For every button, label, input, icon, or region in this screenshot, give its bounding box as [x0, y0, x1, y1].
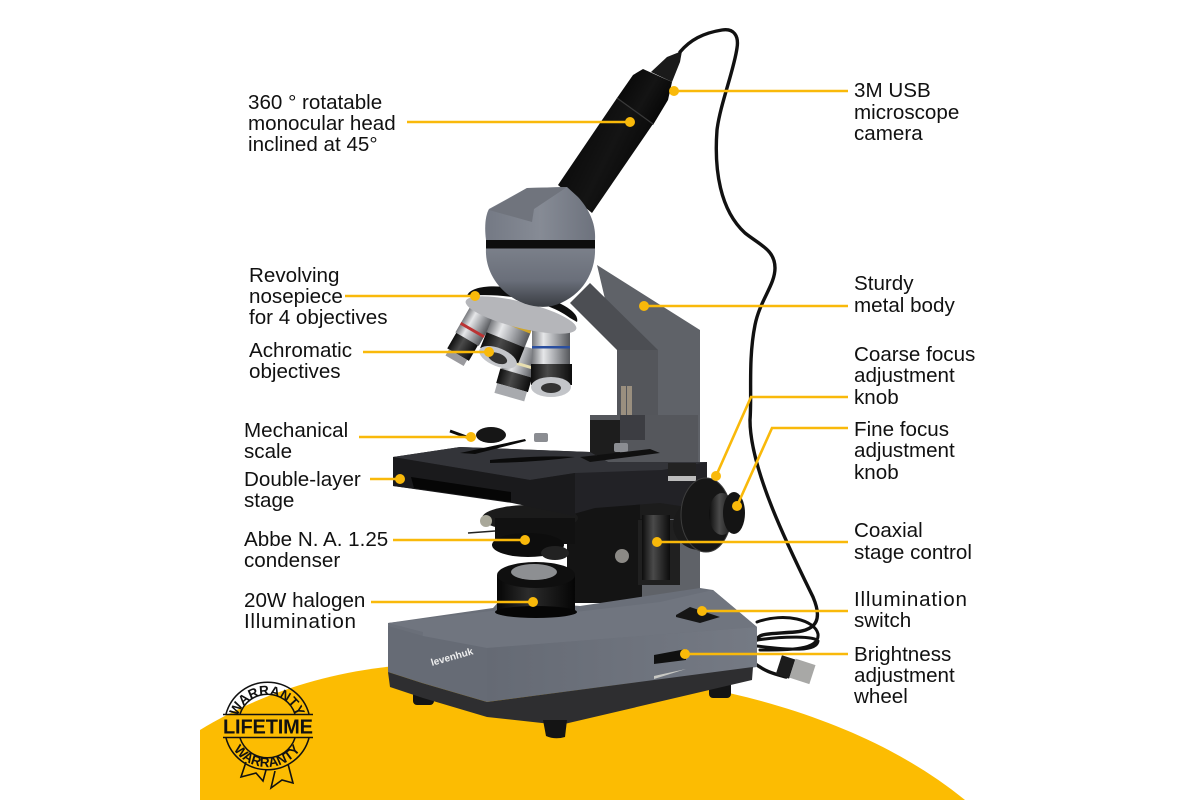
callout: metal body: Sturdy: [854, 272, 914, 295]
microscope head: [485, 187, 595, 307]
callout: coarse focus: [711, 343, 975, 481]
callout: objectives: objectives: [249, 360, 341, 383]
callout: metal body: metal body: [854, 294, 955, 317]
condenser: [468, 505, 578, 560]
callout: objectives: [249, 339, 494, 383]
callout: fine focus: Fine focus: [854, 418, 949, 441]
callout: coaxial: [652, 519, 972, 564]
callout: brightness: [680, 643, 955, 708]
callout: usb camera: microscope: [854, 101, 959, 124]
usb camera: [617, 51, 682, 125]
badge bottom text: WARRANTY: [235, 744, 298, 768]
callout: illumination switch: switch: [854, 609, 911, 632]
callout: nosepiece: for 4 objectives: [249, 306, 388, 329]
callout: mechanical scale: scale: [244, 440, 292, 463]
callout: coaxial: stage control: [854, 541, 972, 564]
callout: coarse focus: knob: [854, 386, 899, 409]
right callouts: [639, 79, 975, 708]
objectives: [443, 301, 572, 402]
callout: halogen: Illumination: [244, 610, 356, 633]
yellow background arc: [200, 664, 965, 800]
callout: nosepiece: Revolving: [249, 264, 339, 287]
callout: fine focus: knob: [854, 461, 899, 484]
callout: brightness: adjustment: [854, 664, 955, 687]
callout: monocular head: monocular head: [248, 112, 396, 135]
callout: monocular head: inclined at 45°: [248, 133, 378, 156]
callout: monocular head: [248, 91, 635, 156]
nosepiece: [463, 286, 579, 341]
mechanical stage: [393, 427, 707, 516]
left callouts: [244, 91, 635, 633]
base feet: [413, 676, 731, 705]
callout: fine focus: [732, 418, 955, 511]
objective red: [443, 306, 494, 367]
coarse and fine focus knobs: [673, 478, 745, 552]
callout: objectives: Achromatic: [249, 339, 352, 362]
objective blue: [531, 326, 572, 397]
badge top text: WARRANTY: [228, 686, 305, 714]
warranty badge: [223, 682, 313, 790]
illumination base: [388, 562, 757, 738]
callout: halogen: 20W halogen: [244, 589, 365, 612]
arm and column: [570, 265, 700, 600]
illumination switch: [676, 607, 720, 623]
badge lifetime text: LIFETIME: [223, 716, 313, 738]
objective yellow: [476, 301, 537, 373]
callout: stage: stage: [244, 489, 294, 512]
focus block behind stage: [567, 415, 698, 603]
callout: usb camera: 3M USB: [854, 79, 931, 102]
brightness wheel: [654, 649, 686, 679]
callout: halogen: [244, 589, 538, 633]
usb plug: [776, 654, 816, 685]
callout: metal body: [639, 272, 955, 317]
callout: mechanical scale: [244, 419, 476, 463]
callout: usb camera: [669, 79, 959, 145]
light collector: [495, 562, 577, 618]
callout: stage: Double-layer: [244, 468, 361, 491]
callout: condenser: [244, 528, 530, 572]
usb cable: [680, 30, 818, 677]
callout: illumination switch: Illumination: [854, 588, 967, 611]
badge rings: [223, 682, 313, 770]
objective white: [493, 342, 540, 402]
eyepiece tube: [558, 98, 653, 213]
callout: coarse focus: Coarse focus: [854, 343, 975, 366]
callout: nosepiece: [249, 264, 480, 329]
callout: condenser: Abbe N. A. 1.25: [244, 528, 388, 551]
callout: nosepiece: nosepiece: [249, 285, 343, 308]
callout: coarse focus: adjustment: [854, 364, 955, 387]
callout: stage: [244, 468, 405, 512]
callout: illumination switch: [697, 588, 967, 632]
callout: coaxial: Coaxial: [854, 519, 923, 542]
levenhuk logo: levenhuk: [430, 646, 475, 669]
badge ribbons: [241, 762, 293, 788]
callout: monocular head: 360 ° rotatable: [248, 91, 382, 114]
callout: condenser: condenser: [244, 549, 340, 572]
callout: mechanical scale: Mechanical: [244, 419, 348, 442]
microscope: [388, 30, 818, 738]
callout: brightness: wheel: [853, 685, 908, 708]
callout: fine focus: adjustment: [854, 439, 955, 462]
callout: brightness: Brightness: [854, 643, 951, 666]
callout: usb camera: camera: [854, 122, 923, 145]
